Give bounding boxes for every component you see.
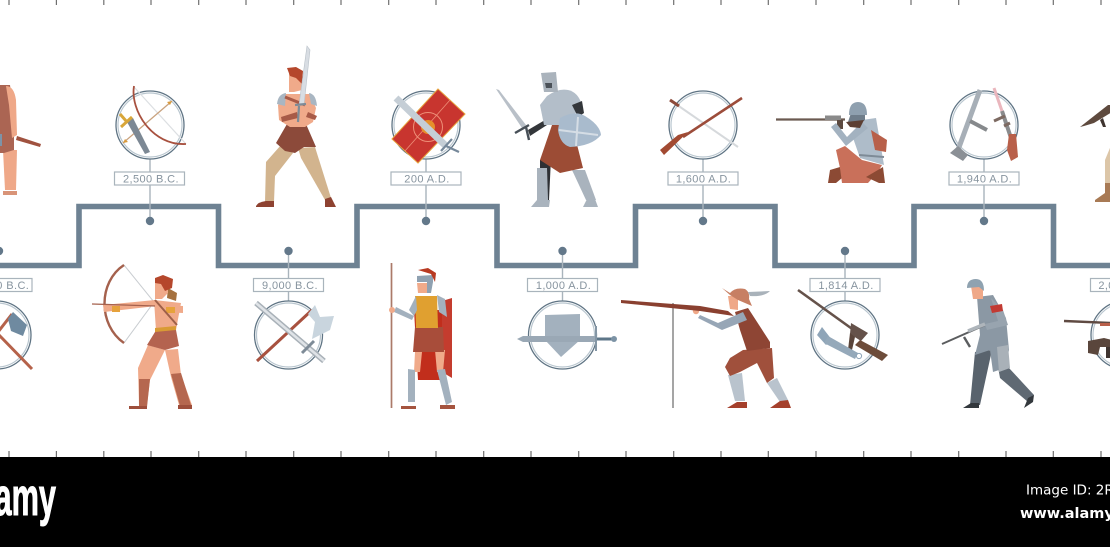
figure: German soldier	[942, 279, 1034, 408]
event marker: 9,000 B.C.	[254, 247, 334, 369]
icon: axe and sword	[254, 301, 334, 369]
figure: Roman legionary	[389, 263, 455, 409]
event marker: 1,814 A.D.	[798, 247, 888, 369]
figure: archer	[92, 265, 192, 409]
icon: crossed axe and club	[0, 301, 32, 369]
icon: musket and sword	[660, 91, 742, 159]
date label: 2,500 B.C.	[123, 174, 179, 186]
figure: cropped modern soldier at right edge	[1080, 105, 1110, 202]
event marker: 2,020 A.D. (cropped)	[1064, 247, 1110, 369]
icon: red shield and sword	[392, 89, 465, 163]
figure: musketeer	[621, 288, 791, 408]
icon: modern rifles	[1064, 301, 1110, 369]
icon: two machine guns	[950, 88, 1018, 161]
figure: swordsman	[256, 46, 336, 207]
stepped timeline line	[0, 206, 1110, 266]
icon: shield and sword	[517, 301, 617, 369]
date label: 1,814 A.D.	[818, 280, 874, 292]
date label: 200 A.D.	[404, 174, 450, 186]
event marker: 2,500 B.C.	[114, 86, 186, 225]
figure: kneeling sniper	[776, 102, 887, 183]
date label: 1,940 A.D.	[957, 174, 1012, 186]
event marker: 1,600 A.D.	[660, 91, 742, 225]
figure: armoured knight	[496, 72, 601, 207]
event marker: 10,000 B.C. (cropped)	[0, 247, 32, 369]
date label: 1,600 A.D.	[676, 174, 731, 186]
footer bar	[0, 457, 1110, 547]
event marker: 1,000 A.D.	[517, 247, 617, 369]
date label: 1,000 A.D.	[536, 280, 591, 292]
date label: 9,000 B.C.	[262, 280, 318, 292]
event marker: 200 A.D.	[391, 89, 465, 225]
icon: rifle and grenade	[798, 290, 888, 369]
icon: sword and bow	[116, 86, 186, 159]
event marker: 1,940 A.D.	[949, 88, 1019, 225]
figure: cropped caveman at left edge	[0, 85, 41, 195]
